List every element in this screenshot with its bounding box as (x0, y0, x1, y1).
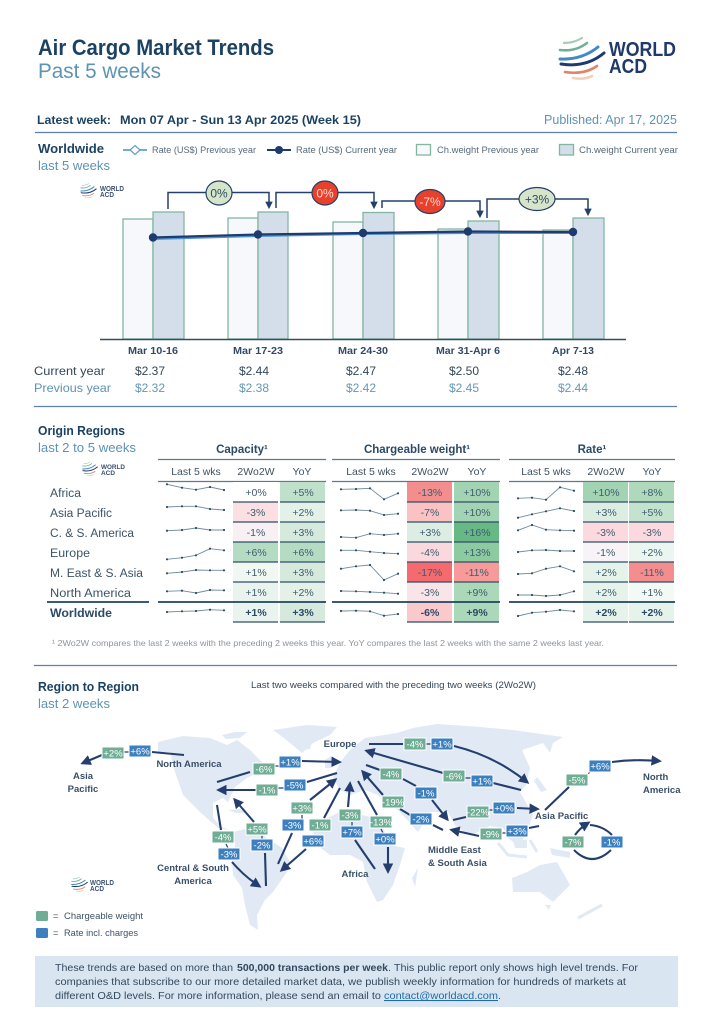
chart legend: Ch.weight Previous year (437, 145, 539, 155)
table: rate 2Wo2W: +3% (595, 507, 617, 519)
table: rate YoY (629, 482, 674, 622)
title (38, 35, 274, 83)
line: rate previous year (153, 233, 573, 239)
region names: Europe (50, 548, 90, 560)
table: rate 2Wo2W: +2% (595, 587, 617, 599)
table: capacity YoY: +2% (292, 507, 314, 519)
map badges: rate: -2% (254, 840, 271, 852)
map badges: rate: +0% (375, 834, 395, 846)
map badges: chargeable weight: -1% (259, 786, 276, 796)
table headers: 2Wo2W (237, 466, 275, 478)
heading: region to region: Region to Region (38, 680, 139, 694)
table: rate 2Wo2W: -1% (597, 547, 615, 559)
latest week line: Published: Apr 17, 2025 (544, 113, 677, 127)
table headers: Capacity¹ (216, 444, 268, 456)
map badges: chargeable weight: -4% (215, 832, 232, 844)
table: rate YoY: -11% (640, 567, 664, 579)
footer note panel: different O&D levels. For more information, please send an email to (55, 990, 381, 1002)
region names: Worldwide (50, 608, 112, 620)
map badges: rate: +6% (590, 762, 610, 772)
map badges: rate (129, 738, 623, 860)
map badges: chargeable weight: -1% (312, 820, 329, 832)
table headers: YoY (468, 466, 486, 478)
week axis labels: Mar 10-16 (128, 345, 178, 357)
map badges: chargeable weight: +5% (247, 824, 267, 836)
heading: region to region (38, 680, 139, 711)
table headers: 2Wo2W (587, 466, 625, 478)
table headers: Rate¹ (578, 444, 607, 456)
callout arrow: +3%: +3% (525, 192, 550, 206)
table: weight 2Wo2W: -3% (421, 587, 439, 599)
map badges: chargeable weight: -5% (569, 776, 586, 786)
title: Air Cargo Market Trends (38, 35, 274, 60)
map labels: North America (156, 759, 222, 770)
week axis labels: Mar 17-23 (233, 345, 283, 357)
map legend: Chargeable weight (64, 911, 143, 922)
map legend: Rate incl. charges (64, 928, 138, 939)
table headers: 2Wo2W (411, 466, 449, 478)
rates table: previous year (34, 381, 588, 395)
map badges: rate: -3% (221, 850, 238, 860)
small logo (72, 877, 114, 893)
table headers: Last 5 wks (346, 466, 396, 478)
map badges: rate: -1% (604, 838, 621, 848)
chart legend: Rate (US$) Previous year (152, 145, 256, 155)
map badges: rate: +6% (130, 746, 150, 758)
table: rate 2Wo2W: -3% (597, 527, 615, 539)
week axis labels (128, 345, 594, 357)
logo: WorldACD: WORLD (609, 39, 676, 61)
table: capacity YoY: +3% (292, 527, 314, 539)
bar chart: chargeable weight (100, 212, 626, 340)
map badges: rate: +6% (303, 836, 323, 848)
table: rate YoY: +5% (641, 507, 663, 519)
rates table: previous year: $2.45 (449, 381, 479, 395)
table: rate YoY: +1% (641, 587, 663, 599)
table: capacity 2Wo2W: -1% (247, 527, 265, 539)
map labels (68, 739, 681, 887)
table: capacity 2Wo2W: -3% (247, 507, 265, 519)
map labels: North (643, 772, 669, 783)
map labels: Asia (73, 771, 94, 782)
table: weight YoY: +10% (463, 507, 491, 519)
map badges: rate: +3% (507, 826, 527, 838)
rates table: current year: $2.50 (449, 364, 479, 378)
map badges: chargeable weight: -7% (565, 838, 582, 848)
map labels: Middle East (428, 845, 482, 856)
small logo: ACD (90, 886, 104, 893)
table: weight 2Wo2W: -7% (421, 507, 439, 519)
sparklines: rate (518, 487, 574, 616)
chart legend: Ch.weight Current year (579, 145, 678, 155)
small logo: WORLD (100, 186, 124, 193)
map badges: chargeable weight: -4% (407, 740, 424, 750)
rates table: previous year: $2.42 (346, 381, 376, 395)
week axis labels: Apr 7-13 (552, 345, 594, 357)
map legend (36, 911, 143, 939)
week axis labels: Mar 24-30 (338, 345, 388, 357)
small logo: ACD (100, 192, 114, 199)
map badges: chargeable weight: +3% (292, 804, 312, 814)
region names: Asia Pacific (50, 508, 112, 520)
map labels: Pacific (68, 784, 98, 795)
table: weight YoY: +10% (463, 487, 491, 499)
map badges: rate: +1% (472, 776, 492, 788)
chart legend (123, 144, 678, 155)
map labels: Africa (342, 869, 369, 880)
heading: origin regions (38, 424, 136, 455)
table: weight 2Wo2W: -6% (421, 607, 440, 619)
map badges: chargeable weight: -9% (483, 830, 500, 840)
footer note panel: 500,000 transactions per week (237, 962, 388, 974)
footnote: ¹ 2Wo2W compares the last 2 weeks with the preceding 2 weeks this year. YoY compares the last 2 weeks with the same 2 weeks last year. (52, 638, 604, 648)
heading: worldwide (38, 141, 110, 173)
table: capacity 2Wo2W: +0% (245, 487, 267, 499)
table: rate 2Wo2W: +2% (595, 567, 617, 579)
table: capacity YoY: +5% (292, 487, 314, 499)
map badges: chargeable weight: -3% (342, 810, 359, 822)
table: weight 2Wo2W: -13% (418, 487, 442, 499)
heading: origin regions: Origin Regions (38, 424, 125, 438)
region names: M. East & S. Asia (50, 568, 144, 580)
table: capacity YoY: +2% (292, 587, 314, 599)
map badges: rate: +1% (280, 758, 300, 768)
table: weight 2Wo2W (407, 482, 452, 622)
map labels: America (643, 785, 681, 796)
latest week line: Latest week: (37, 113, 111, 127)
table: capacity YoY: +3% (292, 567, 314, 579)
heading: worldwide: Worldwide (38, 141, 104, 156)
map badges: chargeable weight: -4% (383, 770, 400, 780)
callout arrow: 0%: 0% (210, 186, 228, 200)
map badges: chargeable weight: +2% (103, 748, 123, 760)
sparklines: capacity (167, 484, 224, 612)
footer note panel: . (498, 990, 501, 1002)
footer note panel: These trends are based on more than (55, 962, 233, 974)
map badges: chargeable weight: -19% (382, 798, 405, 808)
rates table: previous year: $2.38 (239, 381, 269, 395)
map flow arrows (83, 744, 659, 886)
table: rate 2Wo2W: +2% (595, 607, 617, 619)
map labels: Europe (324, 739, 356, 750)
map subtitle: Last two weeks compared with the preceding two weeks (2Wo2W) (251, 680, 536, 691)
rates table: previous year: $2.44 (558, 381, 588, 395)
rates table: previous year: Previous year (34, 381, 111, 395)
title: Past 5 weeks (38, 60, 161, 83)
small logo (81, 184, 124, 199)
region names (50, 488, 144, 620)
map badges: rate: -3% (285, 820, 302, 832)
week axis labels: Mar 31-Apr 6 (436, 345, 500, 357)
table: capacity 2Wo2W: +6% (245, 547, 267, 559)
rates table: current year: $2.48 (558, 364, 588, 378)
table headers: YoY (293, 466, 311, 478)
table: weight YoY: -11% (465, 567, 489, 579)
small logo (83, 462, 125, 477)
callout arrow: 0% (168, 181, 269, 209)
map badges: chargeable weight: -22% (467, 808, 490, 818)
sparklines: chargeable weight (341, 488, 398, 616)
map badges: rate: -5% (287, 780, 304, 792)
map badges: chargeable weight (102, 738, 588, 848)
table: rate YoY: -3% (643, 527, 661, 539)
logo: WorldACD: ACD (609, 56, 647, 78)
table headers: Last 5 wks (521, 466, 571, 478)
callout arrow: -7%: -7% (419, 195, 441, 209)
small logo: WORLD (101, 464, 125, 471)
table headers: Last 5 wks (171, 466, 221, 478)
map labels: & South Asia (428, 858, 487, 869)
table: weight YoY (454, 482, 499, 622)
table: capacity YoY: +6% (292, 547, 314, 559)
table: weight 2Wo2W: -4% (421, 547, 439, 559)
footer note panel (35, 956, 678, 1007)
table: rate YoY: +8% (641, 487, 663, 499)
table: capacity 2Wo2W: +1% (245, 567, 267, 579)
rates table: current year: $2.47 (346, 364, 376, 378)
line: rate current year (149, 227, 577, 242)
footer note panel: . This public report only shows high level trends. For (388, 962, 639, 974)
table: weight 2Wo2W: +3% (419, 527, 441, 539)
map badges: rate: -1% (418, 788, 435, 800)
table: weight 2Wo2W: -17% (418, 567, 442, 579)
callout arrow: +3% (487, 188, 588, 218)
table: weight YoY: +9% (466, 587, 488, 599)
heading: worldwide: last 5 weeks (38, 159, 110, 173)
heading: origin regions: last 2 to 5 weeks (38, 441, 136, 455)
footer note panel: companies that subscribe to our more detailed market data, we publish weekly information for hundreds of markets at (55, 976, 626, 988)
map labels: Central & South (157, 863, 229, 874)
region names: C. & S. America (50, 528, 135, 540)
rates table: previous year: $2.32 (135, 381, 165, 395)
callout arrow: 0% red: 0% (316, 186, 334, 200)
table: weight YoY: +9% (466, 607, 488, 619)
region names: Africa (50, 488, 82, 500)
chart legend: Rate (US$) Current year (296, 145, 397, 155)
table: rate YoY: +2% (641, 547, 663, 559)
world map (158, 724, 602, 930)
map badges: rate: +1% (432, 740, 452, 750)
table headers: Chargeable weight¹ (364, 444, 470, 456)
rates table: current year: $2.37 (135, 364, 165, 378)
table headers: YoY (643, 466, 661, 478)
footer note panel: contact@worldacd.com (384, 990, 498, 1002)
table: capacity 2Wo2W (233, 482, 278, 622)
table headers (158, 444, 675, 482)
rates table: current year (34, 364, 588, 378)
table: rate 2Wo2W: +10% (592, 487, 620, 499)
table: capacity YoY (280, 482, 325, 622)
latest week line: Mon 07 Apr - Sun 13 Apr 2025 (Week 15) (120, 113, 361, 127)
map badges: rate: +7% (342, 828, 362, 838)
small logo: WORLD (90, 880, 114, 887)
rates table: current year: Current year (34, 364, 105, 378)
latest week line (37, 113, 677, 127)
heading: region to region: last 2 weeks (38, 697, 110, 711)
table: rate YoY: +2% (641, 607, 663, 619)
logo: WorldACD (560, 38, 676, 79)
table: capacity 2Wo2W: +1% (245, 587, 267, 599)
map labels: Asia Pacific (535, 811, 588, 822)
table: weight YoY: +16% (463, 527, 491, 539)
map badges: chargeable weight: -6% (446, 772, 463, 782)
table: capacity 2Wo2W: +1% (245, 607, 267, 619)
map legend: = (53, 928, 58, 938)
callout arrow: 0% red (276, 181, 374, 208)
map badges: chargeable weight: -6% (256, 764, 273, 776)
rates table: current year: $2.44 (239, 364, 269, 378)
table: weight YoY: +13% (463, 547, 491, 559)
map labels: America (174, 876, 212, 887)
table: rate 2Wo2W (583, 482, 628, 622)
callout arrow: -7% (382, 190, 480, 216)
table: capacity YoY: +3% (292, 607, 314, 619)
region names: North America (50, 588, 132, 600)
map badges: rate: -2% (413, 814, 430, 826)
map badges: rate: +0% (494, 804, 514, 814)
map legend: = (53, 911, 58, 921)
map badges: chargeable weight: -13% (370, 818, 393, 828)
small logo: ACD (101, 470, 115, 477)
